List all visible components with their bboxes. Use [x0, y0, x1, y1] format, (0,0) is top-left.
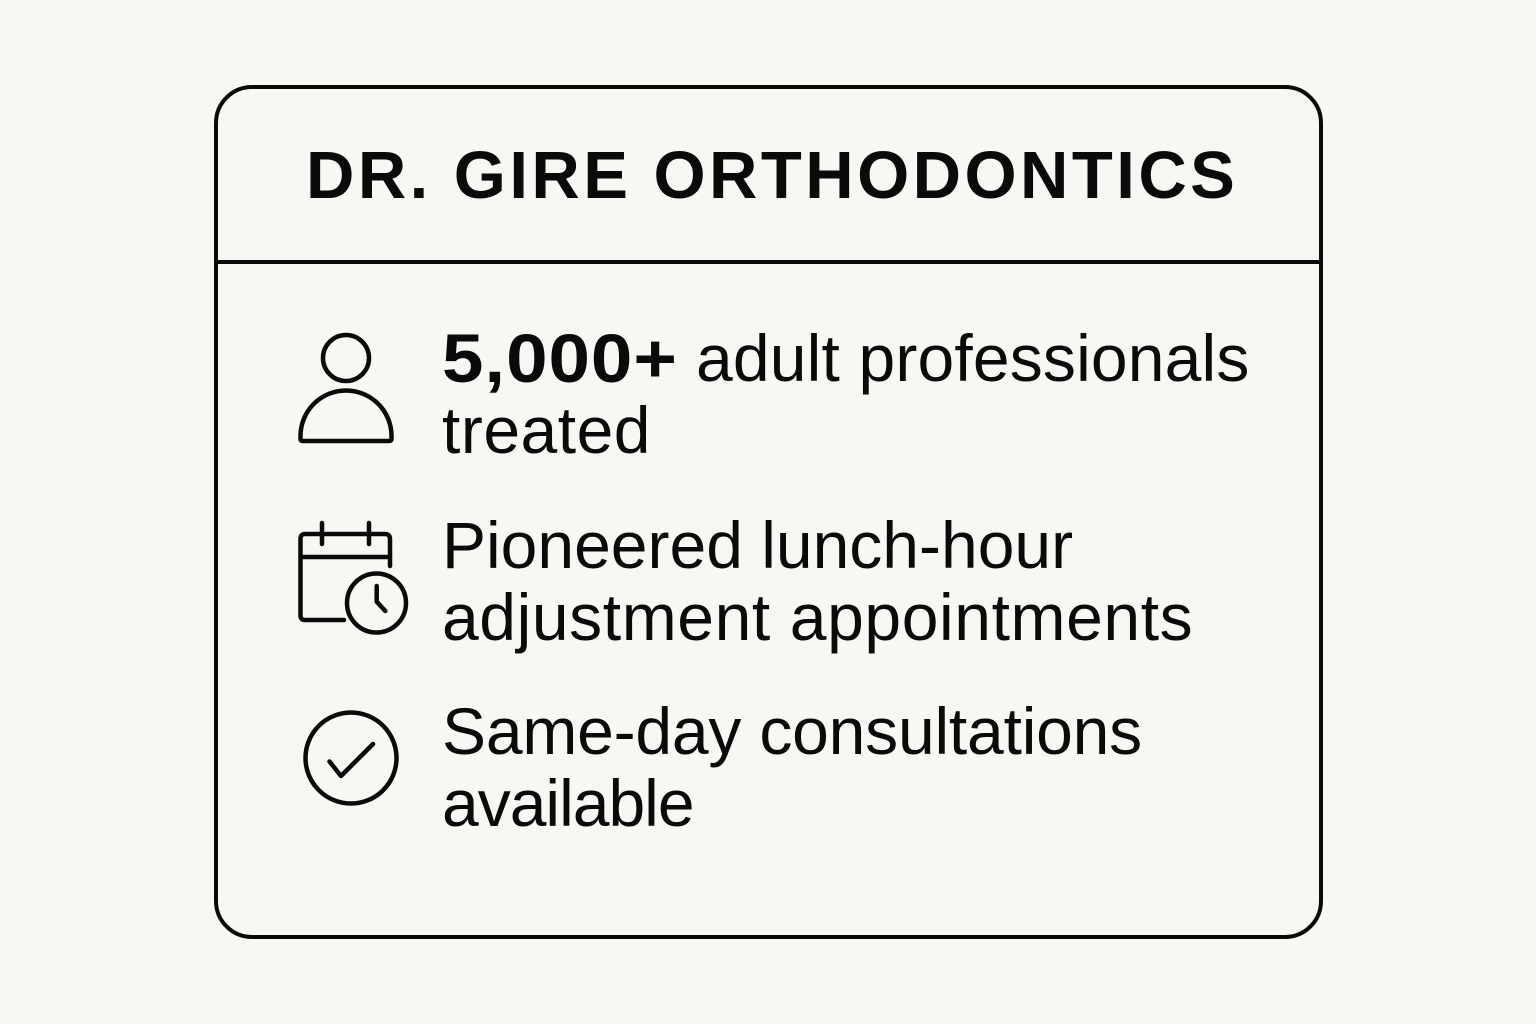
text: same-day consultations: available [442, 766, 694, 840]
icon: calendar with clock [298, 520, 408, 635]
divider line [216, 260, 1321, 264]
text: adult professionals: adult professionals [696, 321, 1250, 395]
text: same-day consultations: Same-day consultations [442, 694, 1142, 768]
text: adult professionals: 5,000+ [442, 320, 678, 397]
text: lunch-hour appointments [442, 508, 1193, 654]
text: lunch-hour appointments: Pioneered lunch-hour [442, 508, 1073, 582]
panel: card [214, 85, 1323, 939]
text: lunch-hour appointments: adjustment appointments [442, 580, 1193, 654]
icon: check circle [303, 710, 399, 806]
text: adult professionals [442, 320, 1250, 467]
title: DR. GIRE ORTHODONTICS [306, 138, 1238, 213]
text: adult professionals: treated [442, 393, 651, 467]
icon: person [298, 332, 394, 444]
text: same-day consultations [442, 694, 1142, 840]
